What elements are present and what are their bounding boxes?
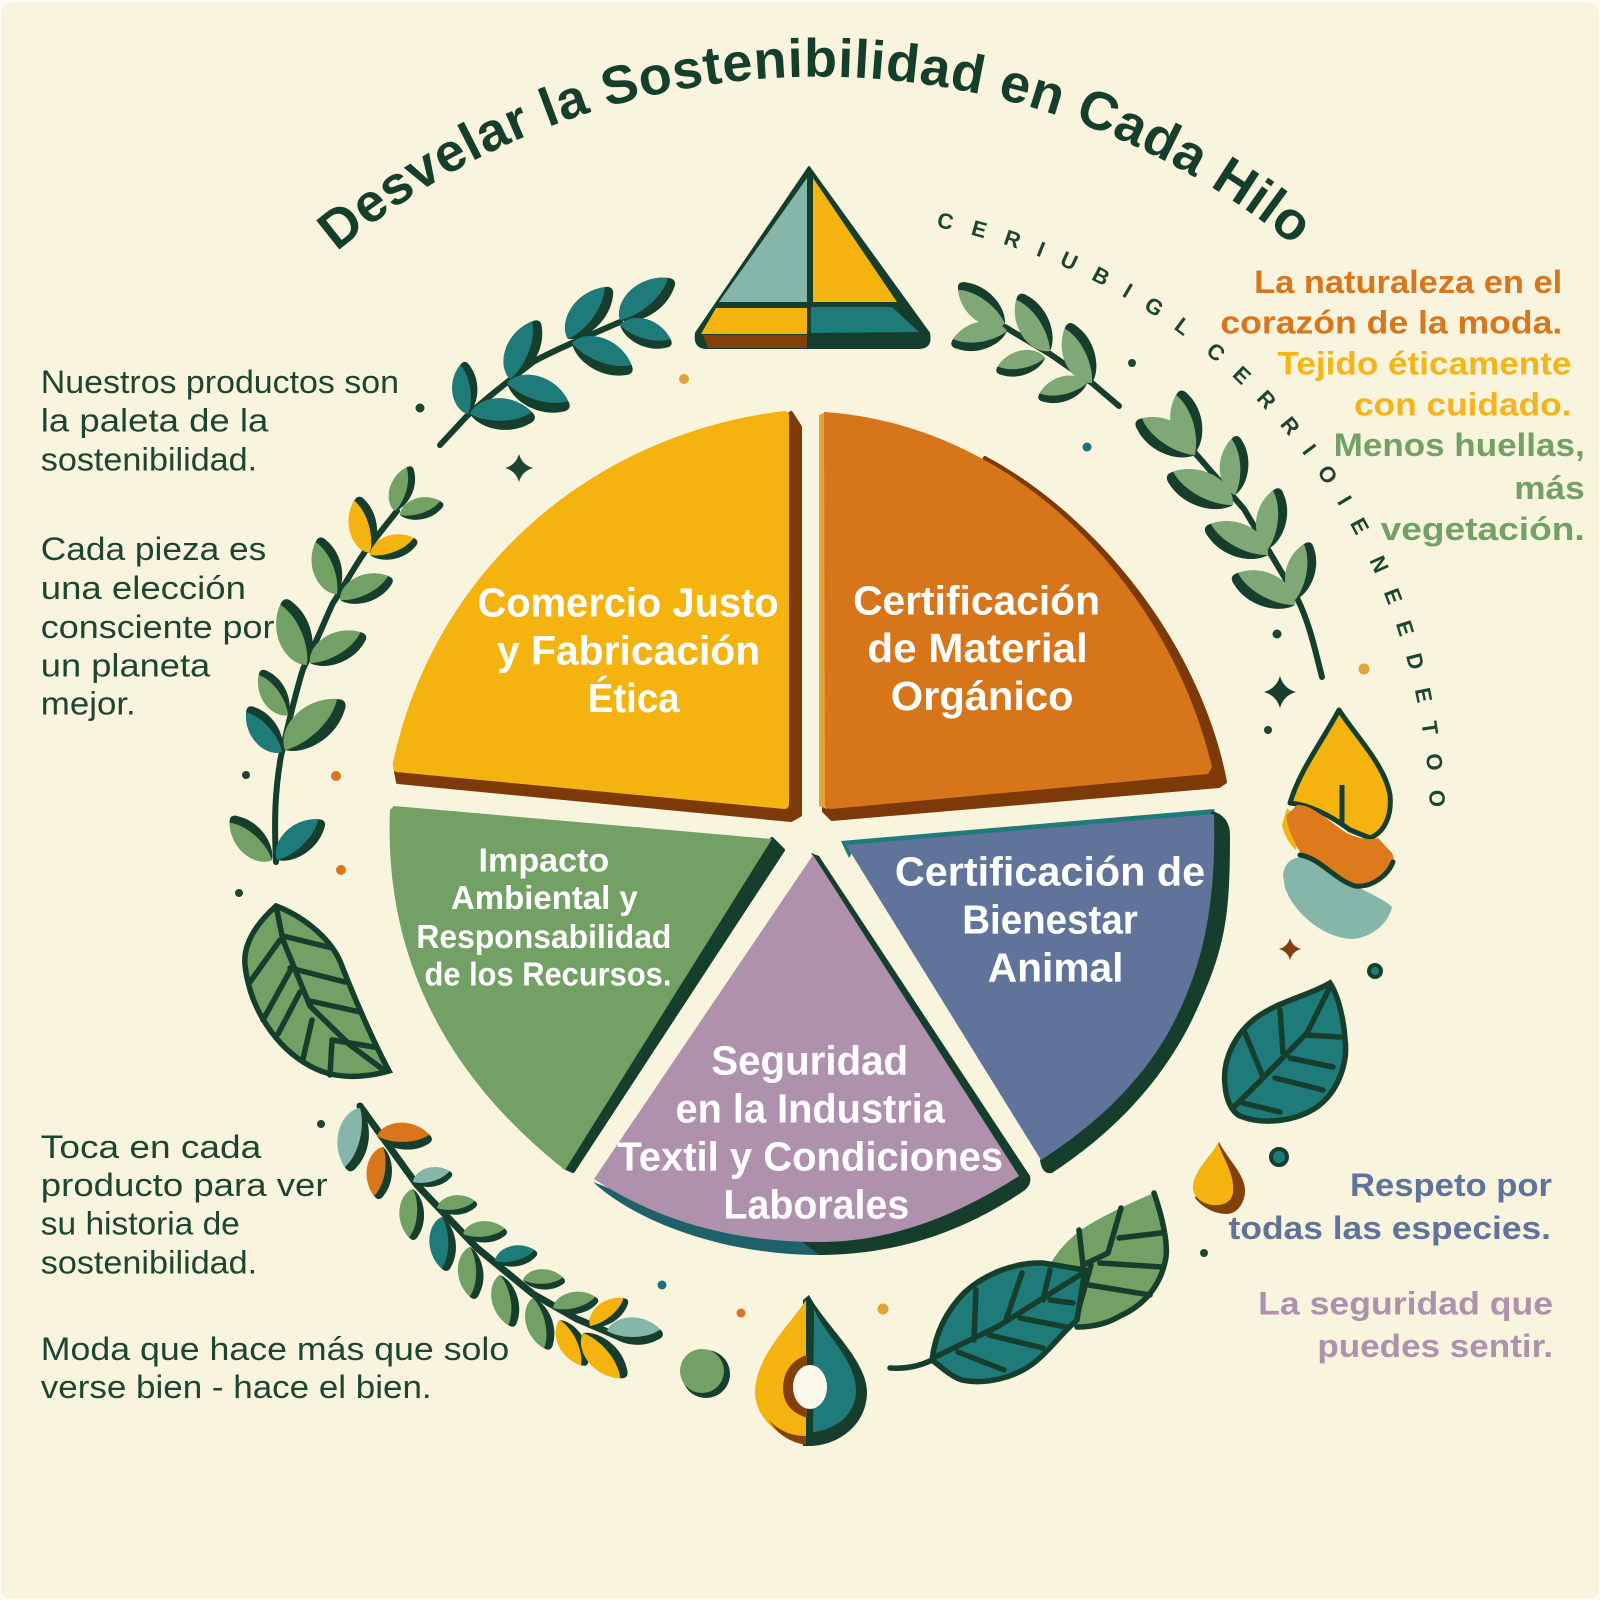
- icon: green sprig right: [1129, 387, 1322, 677]
- panel: impacto ambiental: Ambiental y: [451, 880, 638, 917]
- text block: left second: una elección: [41, 569, 246, 606]
- text block: left third: su historia de: [41, 1205, 240, 1242]
- green back leaf: [1048, 1193, 1168, 1327]
- panel: certificacion organica: [819, 412, 1225, 819]
- panel: bienestar animal: Certificación de: [895, 849, 1205, 895]
- icon: multicolor sprig bottom left: [332, 1105, 663, 1389]
- panel: comercio justo: [393, 411, 800, 820]
- text block: right green: vegetación.: [1381, 510, 1585, 547]
- icon: triangle: [696, 167, 930, 348]
- panel: seguridad laboral: Laborales: [723, 1181, 909, 1227]
- icon: double leaf bottom: [890, 1193, 1168, 1382]
- panel: comercio justo: y Fabricación: [497, 627, 760, 673]
- panel: comercio justo: Comercio Justo: [478, 579, 779, 625]
- panel: comercio justo: Ética: [588, 675, 680, 721]
- text block: left top: Nuestros productos son: [41, 363, 399, 400]
- icon: small yellow drop: [1193, 1142, 1245, 1214]
- icon: layered flame: [1282, 710, 1394, 939]
- panel: seguridad laboral: [593, 853, 1030, 1255]
- panel: seguridad laboral: Textil y Condiciones: [617, 1133, 1003, 1179]
- text block: right orange: corazón de la moda.: [1220, 304, 1562, 341]
- text block: right yellow: con cuidado.: [1354, 385, 1571, 422]
- panel: certificacion organica: Certificación: [853, 577, 1100, 623]
- panel: bienestar animal: Bienestar: [962, 897, 1138, 943]
- teal front leaf: [890, 1263, 1085, 1382]
- text block: right purple: La seguridad que: [1258, 1284, 1553, 1321]
- icon: bottom droplet: [755, 1295, 867, 1446]
- text block: left top: la paleta de la: [41, 402, 269, 439]
- text block: left second: un planeta: [41, 647, 211, 684]
- text block: right blue: Respeto por: [1350, 1166, 1552, 1203]
- icon: large green leaf: [245, 906, 389, 1076]
- text block: left fourth: Moda que hace más que solo: [41, 1330, 509, 1367]
- title: Desvelar la Sostenibilidad en Cada Hilo: [316, 38, 1306, 250]
- text block: right green: más: [1514, 469, 1585, 506]
- icon: green circle: [680, 1349, 730, 1398]
- text block: right yellow: Tejido éticamente: [1278, 344, 1571, 381]
- text block: right purple: puedes sentir.: [1317, 1327, 1553, 1364]
- panel: seguridad laboral: Seguridad: [711, 1037, 908, 1083]
- text block: right blue: todas las especies.: [1229, 1209, 1551, 1246]
- icon: teal sprig top left: [440, 265, 682, 445]
- text block: left second: mejor.: [41, 684, 136, 721]
- text block: right green: Menos huellas,: [1334, 426, 1585, 463]
- text block: left third: Toca en cada: [41, 1128, 262, 1165]
- text block: left third: producto para ver: [41, 1166, 328, 1203]
- text block: left top: sostenibilidad.: [41, 440, 257, 477]
- panel: impacto ambiental: Responsabilidad: [416, 919, 671, 956]
- panel: impacto ambiental: [390, 806, 783, 1171]
- text block: left third: sostenibilidad.: [41, 1243, 257, 1280]
- pie chart: [390, 411, 1230, 1255]
- panel: seguridad laboral: en la Industria: [676, 1085, 945, 1131]
- panel: impacto ambiental: Impacto: [479, 842, 609, 879]
- text block: right orange: La naturaleza en el: [1254, 263, 1562, 300]
- icon: green sprig top right: [948, 274, 1119, 408]
- curved small lettering: CERIUBIGL CERRIOIE NEEDETOO: [938, 213, 1445, 806]
- icon: green sprig left: [219, 462, 446, 871]
- text block: left second: consciente por: [41, 608, 275, 645]
- text block: left second: Cada pieza es: [41, 530, 266, 567]
- panel: certificacion organica: Orgánico: [891, 673, 1073, 719]
- icon: large teal leaf: [1225, 983, 1346, 1121]
- decorative dots and sparkles: [235, 359, 1381, 1318]
- panel: certificacion organica: de Material: [867, 625, 1088, 671]
- panel: bienestar animal: [841, 809, 1230, 1173]
- panel: impacto ambiental: de los Recursos.: [424, 957, 671, 994]
- panel: bienestar animal: Animal: [988, 945, 1123, 991]
- text block: left fourth: verse bien - hace el bien.: [41, 1368, 432, 1405]
